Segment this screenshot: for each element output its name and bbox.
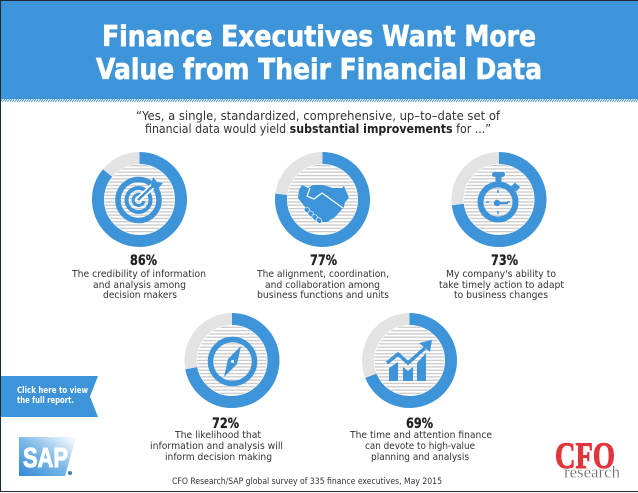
panel: 86% credibility <box>71 158 206 301</box>
description: planning and analysis <box>371 452 469 463</box>
description: The time and attention finance <box>349 430 492 441</box>
subtitle quote: financial data would yield substantial improvements for ...” <box>145 121 491 136</box>
description: to business changes <box>454 290 548 301</box>
label 77%: 77% <box>310 253 337 269</box>
icon: handshake <box>298 185 349 225</box>
donut chart 77% <box>281 158 364 241</box>
callout: click here banner: the full report. <box>17 396 74 406</box>
panel: 77% alignment <box>256 158 389 301</box>
donut chart 72% <box>190 319 274 402</box>
logo: SAP <box>19 437 76 476</box>
description: take timely action to adapt <box>439 280 564 291</box>
description <box>256 269 389 301</box>
panel: 69% time and attention <box>349 319 492 463</box>
panel: 72% likelihood <box>150 319 283 463</box>
label 73%: 73% <box>491 253 518 269</box>
description: and analysis among <box>93 280 186 291</box>
header band <box>1 1 638 102</box>
subtitle quote: “Yes, a single, standardized, comprehensive, up–to–date set of <box>136 108 501 123</box>
callout: click here banner <box>1 376 98 417</box>
description: The credibility of information <box>71 269 206 280</box>
label 86%: 86% <box>130 253 157 269</box>
logo: SAP: SAP <box>23 442 68 473</box>
description: business functions and units <box>257 290 389 301</box>
description: information and analysis will <box>150 441 283 452</box>
logo: CFO research: research <box>564 462 621 482</box>
label 72%: 72% <box>212 416 239 432</box>
callout: click here banner: Click here to view <box>17 386 88 396</box>
description <box>71 269 206 301</box>
icon: compass <box>210 340 254 384</box>
icon: target <box>118 177 163 220</box>
title: Value from Their Financial Data <box>96 53 542 86</box>
source note: CFO Research/SAP global survey of 335 finance executives, May 2015 <box>172 477 442 487</box>
title <box>96 20 542 86</box>
description: My company's ability to <box>446 269 556 280</box>
description: The likelihood that <box>174 430 261 441</box>
subtitle quote <box>136 108 501 136</box>
label 69%: 69% <box>406 416 433 432</box>
description: inform decision making <box>165 452 272 463</box>
icon: growth chart <box>387 340 432 381</box>
description: The alignment, coordination, <box>256 269 389 280</box>
icon: stopwatch <box>480 172 520 220</box>
description: and collaboration among <box>265 280 380 291</box>
description <box>439 269 564 301</box>
title: Finance Executives Want More <box>102 20 536 53</box>
donut chart 86% <box>98 158 181 241</box>
description <box>150 430 283 463</box>
description: decision makers <box>103 290 177 301</box>
donut chart 69% <box>368 319 451 402</box>
donut chart 73% <box>458 158 540 241</box>
description: can devote to high-value <box>365 441 475 452</box>
description <box>349 430 492 463</box>
panel: 73% timely action <box>439 158 564 301</box>
logo: CFO research: CFO <box>555 436 615 477</box>
